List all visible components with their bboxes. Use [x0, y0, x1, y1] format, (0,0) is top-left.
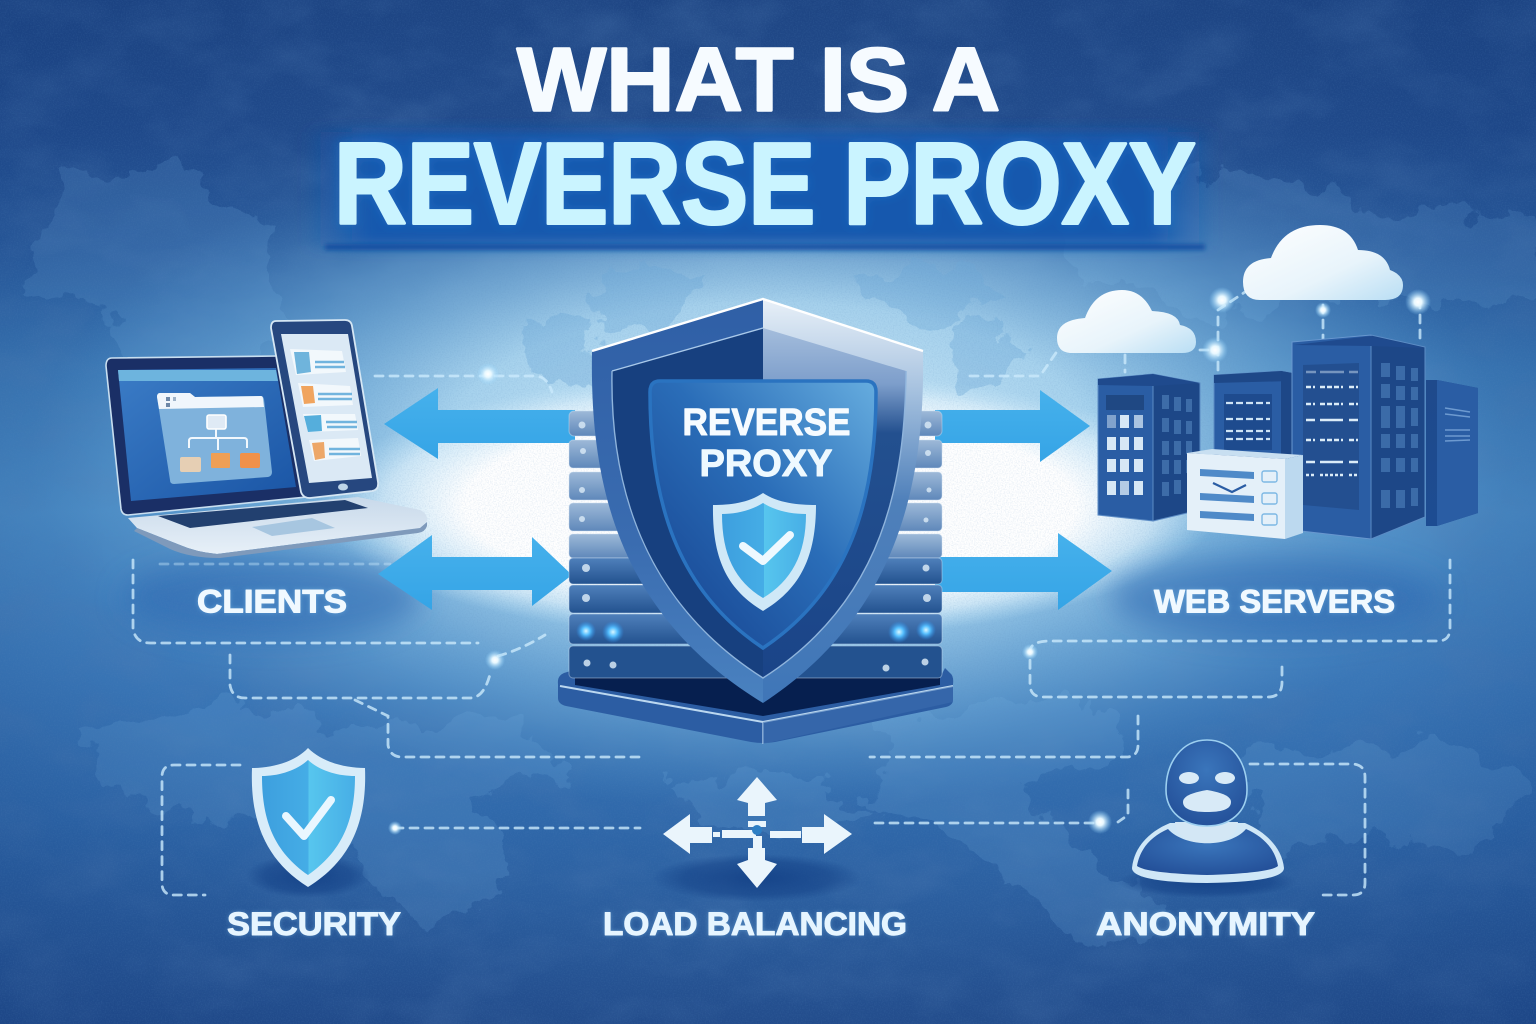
- glowing network nodes: [388, 287, 1431, 835]
- label: web servers: WEB SERVERS: [1154, 584, 1395, 620]
- shield label: PROXY: [700, 443, 832, 485]
- shield label: REVERSE: [682, 402, 850, 444]
- folder window: [157, 393, 272, 484]
- icon: clouds: [1057, 225, 1403, 353]
- dashed network connectors: [133, 292, 1450, 895]
- icon: masked person: [1117, 740, 1297, 898]
- panel: web servers: [1057, 225, 1478, 539]
- title: reverse proxy: REVERSE PROXY: [334, 118, 1196, 248]
- icon: white server box: [1187, 449, 1303, 539]
- server stack base: [558, 668, 953, 744]
- small shield with check: [713, 493, 816, 611]
- title band: [305, 132, 1215, 250]
- panel: anonymity: [1096, 740, 1315, 942]
- masked head: [1166, 740, 1247, 826]
- status lights: [576, 422, 936, 672]
- arrow: top right to servers: [935, 390, 1090, 462]
- title: what is a: WHAT IS A: [517, 30, 1000, 130]
- panel: security: [227, 748, 401, 942]
- icon: server building 4: [1426, 380, 1478, 526]
- panel: clients devices: [106, 320, 427, 558]
- panel: central reverse proxy: [558, 299, 953, 744]
- arrow: bottom right to servers: [935, 533, 1112, 610]
- shield label: [682, 402, 850, 485]
- arrow: top left to clients: [384, 388, 575, 459]
- icon: four way arrows: [652, 777, 862, 902]
- server stack: [569, 411, 942, 678]
- panel: load balancing: [603, 777, 907, 942]
- icon: laptop: [106, 356, 427, 558]
- label: clients: CLIENTS: [197, 584, 347, 620]
- main shield: [592, 299, 923, 703]
- arrow: bottom left double headed: [378, 535, 572, 610]
- label: load balancing: LOAD BALANCING: [603, 906, 907, 942]
- icon: server building 1: [1098, 374, 1200, 521]
- icon: tablet: [271, 320, 378, 498]
- label: anonymity: ANONYMITY: [1096, 906, 1315, 942]
- icon: server building 3: [1292, 335, 1425, 539]
- label: security: SECURITY: [227, 906, 401, 942]
- icon: security shield: [246, 748, 370, 898]
- icon: server building 2: [1214, 371, 1292, 460]
- body: [1132, 823, 1284, 883]
